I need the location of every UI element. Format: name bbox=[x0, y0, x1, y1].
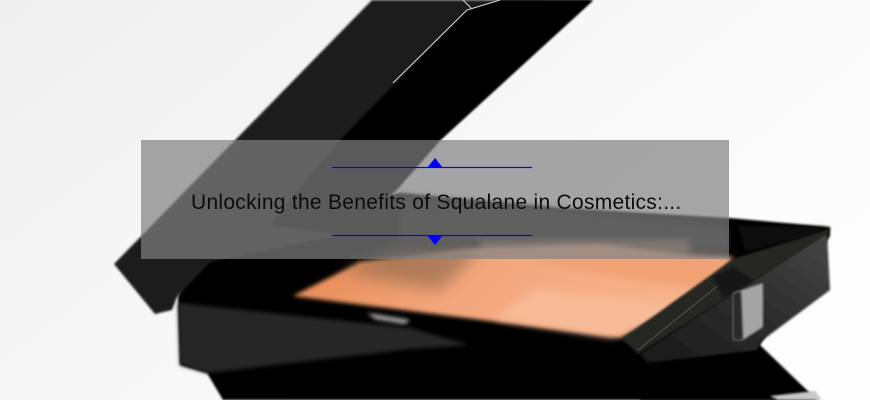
lower tray bbox=[640, 353, 822, 400]
compact base: front face bbox=[178, 303, 470, 373]
translucent grey title panel bbox=[141, 140, 729, 259]
title: Unlocking the Benefits of Squalane in Cosmetics:... bbox=[191, 191, 682, 214]
compact base: rim band and right face with hinge bbox=[622, 225, 830, 363]
compact base: black body and interior rim bbox=[178, 193, 830, 400]
bottom ornament: blue line with down triangle bbox=[332, 234, 532, 245]
compact lid bbox=[114, 0, 593, 314]
top ornament: blue line with up triangle bbox=[332, 158, 532, 168]
